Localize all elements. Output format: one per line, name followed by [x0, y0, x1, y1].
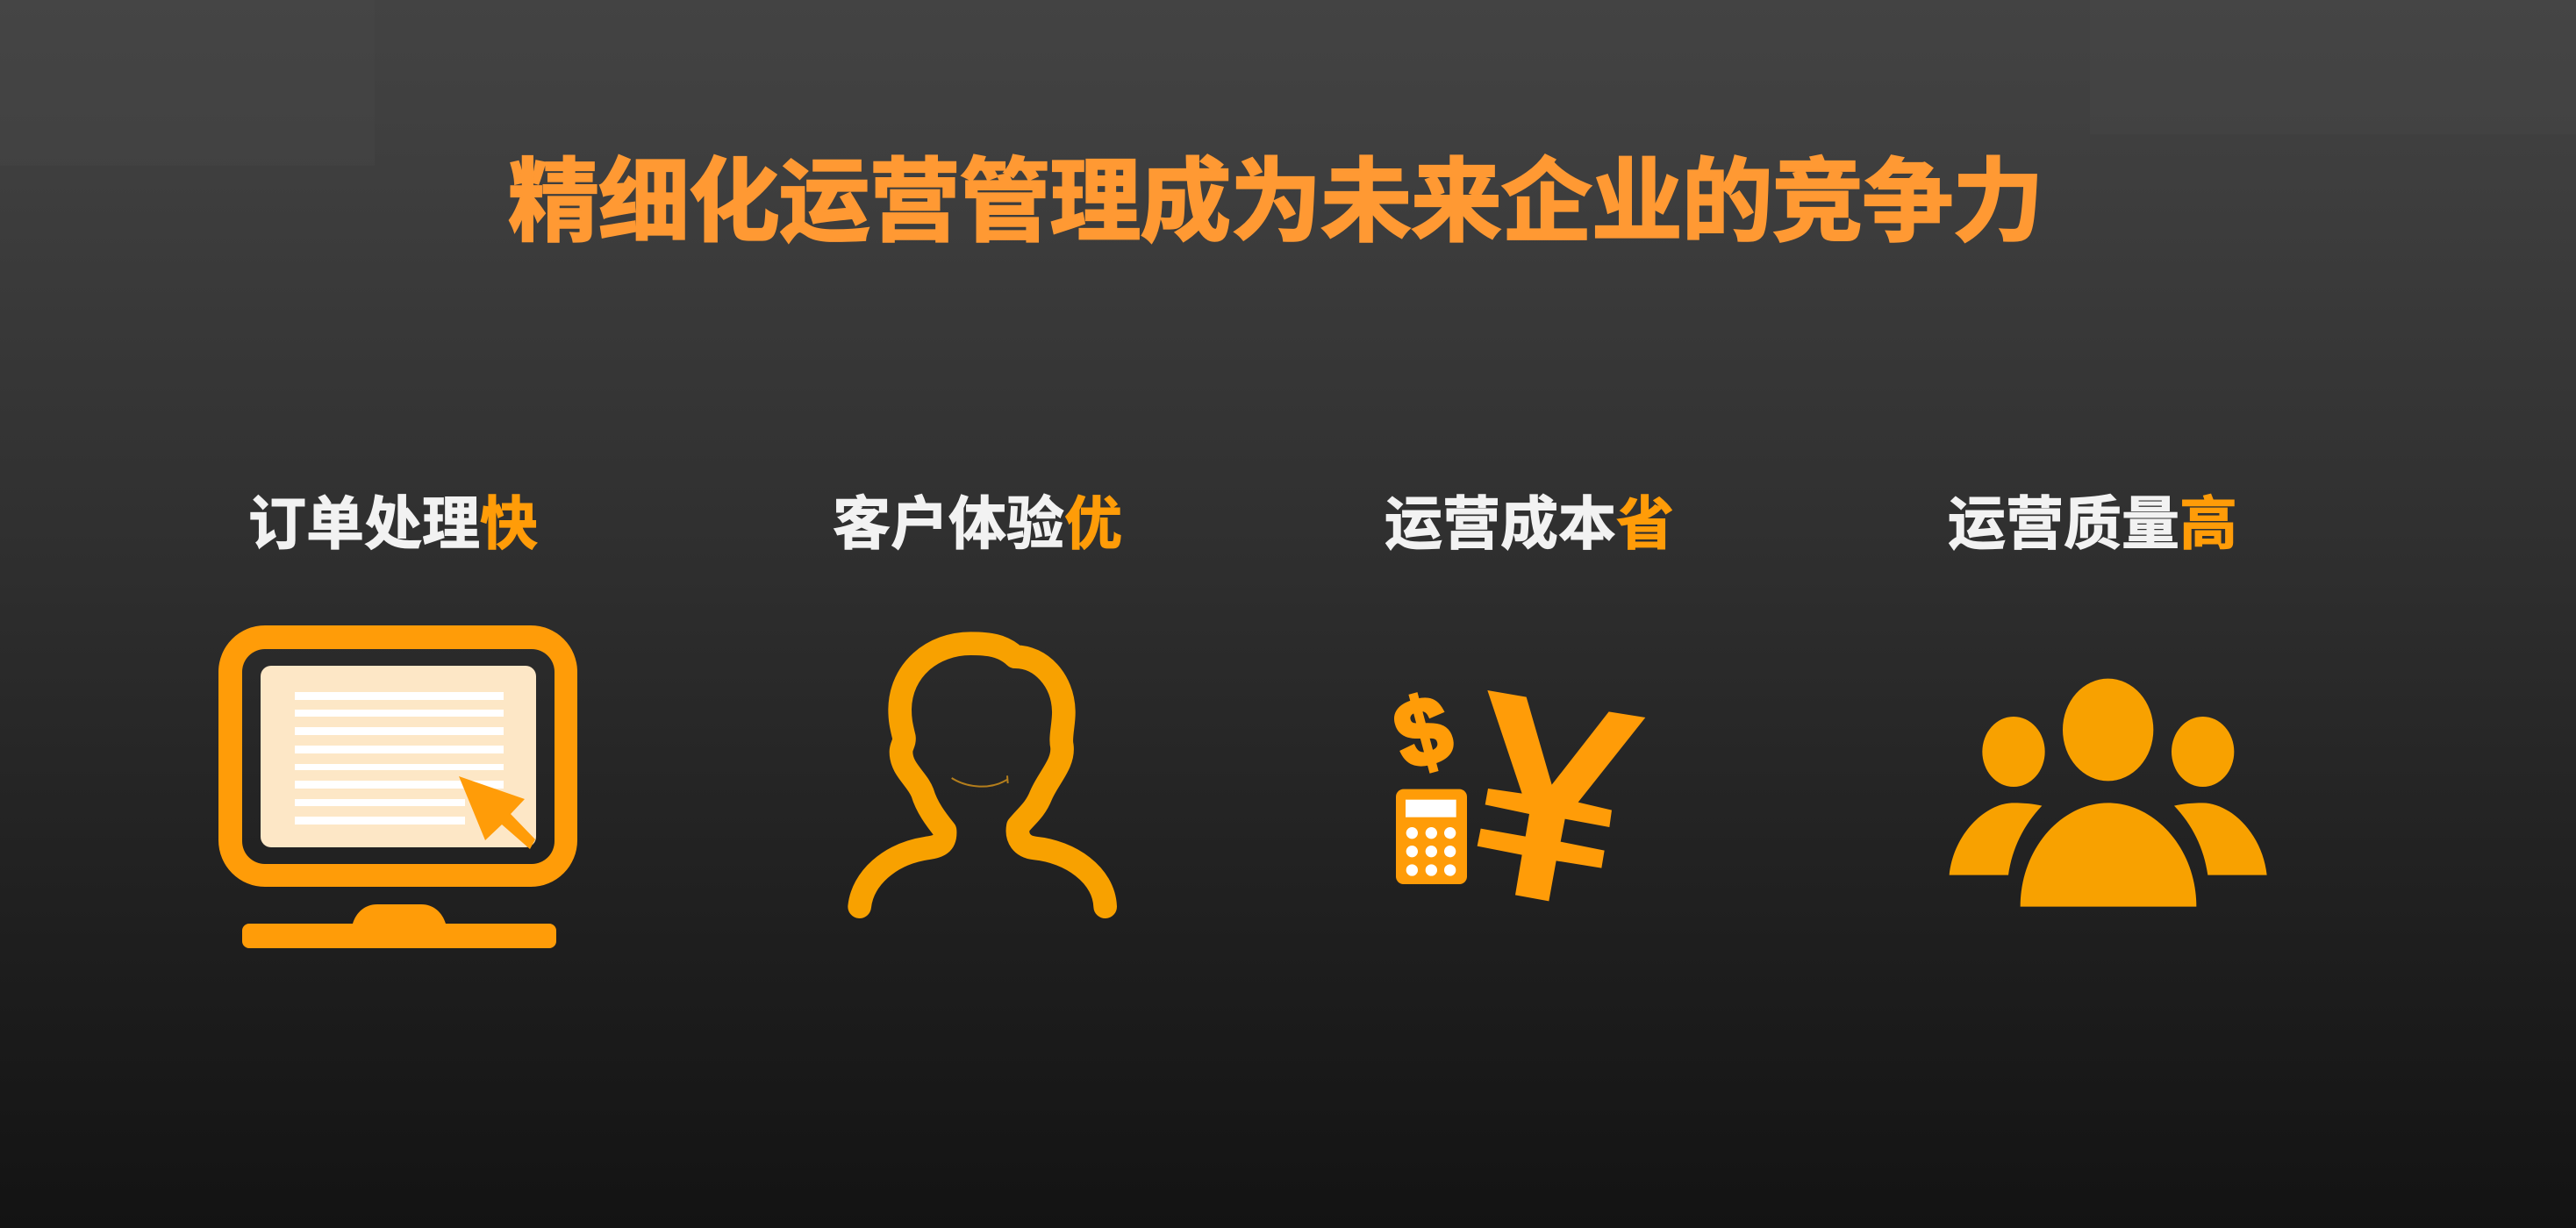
- icon: three people: [1950, 679, 2267, 907]
- panel: customer experience: [833, 491, 1122, 918]
- yen symbol: [1477, 690, 1645, 902]
- calculator: [1396, 789, 1467, 884]
- dollar sign: $: [1384, 674, 1462, 790]
- heading: customer experience excellent: 客户体验优: [833, 491, 1122, 556]
- monitor frame: [218, 625, 577, 887]
- icon: person outline: [848, 632, 1117, 918]
- heading: operating cost saved: 运营成本省: [1385, 491, 1674, 556]
- heading: order processing fast: 订单处理快: [248, 491, 538, 556]
- icon: dollar, calculator and yen: [1384, 674, 1646, 902]
- screen: [261, 666, 536, 847]
- panel: operating cost: [1384, 491, 1674, 902]
- title: 精细化运营管理成为未来企业的竞争力: [508, 152, 2043, 253]
- icon: monitor with cursor: [218, 625, 577, 948]
- heading: operating quality high: 运营质量高: [1948, 491, 2237, 556]
- panel: operating quality: [1948, 491, 2267, 907]
- panel: order processing: [218, 491, 577, 948]
- text lines: [295, 692, 504, 825]
- person outline: [860, 643, 1106, 906]
- smile mark: [952, 775, 1008, 786]
- monitor stand: [242, 904, 556, 948]
- cursor arrow: [459, 776, 535, 849]
